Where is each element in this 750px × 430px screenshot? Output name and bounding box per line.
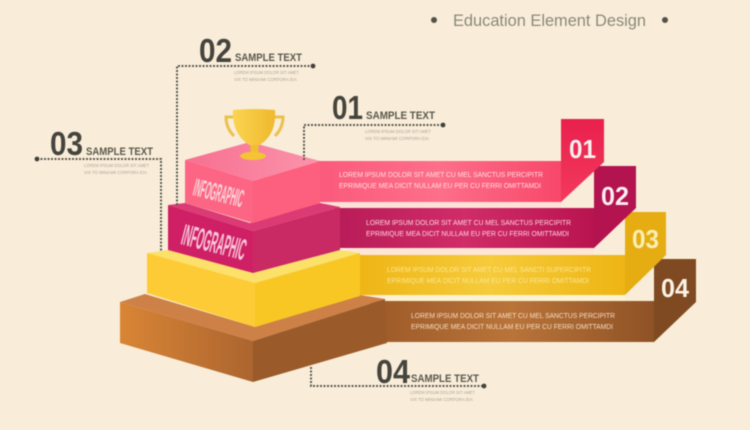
callout 03: VIX TO MINIAMI CORPORA EIA <box>84 170 147 175</box>
callout 02: 02 <box>199 32 232 69</box>
pyramid tier 4 brown <box>120 294 387 382</box>
callout 04: SAMPLE TEXT <box>411 373 479 385</box>
callout 04: LOREM IPSUM DOLOR SIT AMET <box>410 390 475 395</box>
callout 04: VIX TO MINIAMI CORPORA EIA <box>410 397 473 402</box>
ribbon 01 pink: 01 <box>569 134 596 164</box>
callout 03: 03 <box>50 125 83 162</box>
callout 04: 04 <box>376 353 411 390</box>
ribbon 04 brown: 04 <box>661 273 690 303</box>
callout 03 <box>35 125 161 252</box>
ribbon 02 magenta: 02 <box>601 181 629 211</box>
callout 02: LOREM IPSUM DOLOR SIT AMET <box>234 70 299 75</box>
callout 02 <box>177 32 315 205</box>
callout 01: 01 <box>332 89 363 126</box>
pyramid tier 2 magenta <box>168 203 340 273</box>
ribbon 04 brown <box>370 259 696 347</box>
ribbon 01 pink <box>318 119 604 202</box>
ribbon 03 yellow: LOREM IPSUM DOLOR SIT AMET CU MEL SANCTI SUPERCIPITR <box>387 267 591 274</box>
label: INFOGRAPHIC pink: INFOGRAPHIC <box>191 173 247 213</box>
callout 01: VIX TO MINIAMI CORPORA EIA <box>365 136 429 141</box>
pyramid tier 1 pink <box>185 142 320 223</box>
callout 03: LOREM IPSUM DOLOR SIT AMET <box>84 163 149 168</box>
callout 01: SAMPLE TEXT <box>366 110 435 122</box>
pyramid tier 3 yellow <box>147 250 360 327</box>
ribbon 04 brown: LOREM IPSUM DOLOR SIT AMET CU MEL SANCTUS PERCIPITR <box>411 313 615 320</box>
callout 02: VIX TO MINIAMI CORPORA EIA <box>234 77 297 82</box>
header: Education Element Design: Education Element Design <box>453 11 646 30</box>
ribbon 02 magenta: EPRIMIQUE MEA DICIT NULLAM EU PER CU FERRI OMITTAMDI <box>366 231 569 238</box>
label: INFOGRAPHIC magenta: INFOGRAPHIC <box>178 218 250 267</box>
ribbon 03 yellow: 03 <box>632 224 659 254</box>
callout 02: SAMPLE TEXT <box>235 52 302 64</box>
ribbon 04 brown: EPRIMIQUE MEA DICIT NULLAM EU PER CU FERRI OMITTAMDI <box>411 324 613 331</box>
callout 04 <box>311 353 486 402</box>
ribbon 01 pink: EPRIMIQUE MEA DICIT NULLAM EU PER CU FERRI OMITTAMDI <box>339 183 541 190</box>
ribbon 03 yellow <box>345 212 666 297</box>
ribbon 03 yellow: EPRIMIQUE MEA DICIT NULLAM EU PER CU FERRI OMITTAMDI <box>387 278 589 285</box>
icon: trophy <box>226 109 283 160</box>
callout 01 <box>304 89 445 160</box>
ribbon 02 magenta: LOREM IPSUM DOLOR SIT AMET CU MEL SANCTUS PERCIPITR <box>366 220 571 227</box>
callout 01: LOREM IPSUM DOLOR SIT AMET <box>365 129 431 134</box>
callout 03: SAMPLE TEXT <box>86 146 153 158</box>
ribbon 01 pink: LOREM IPSUM DOLOR SIT AMET CU MEL SANCTUS PERCIPITR <box>339 172 543 179</box>
ribbon 02 magenta <box>320 166 636 250</box>
